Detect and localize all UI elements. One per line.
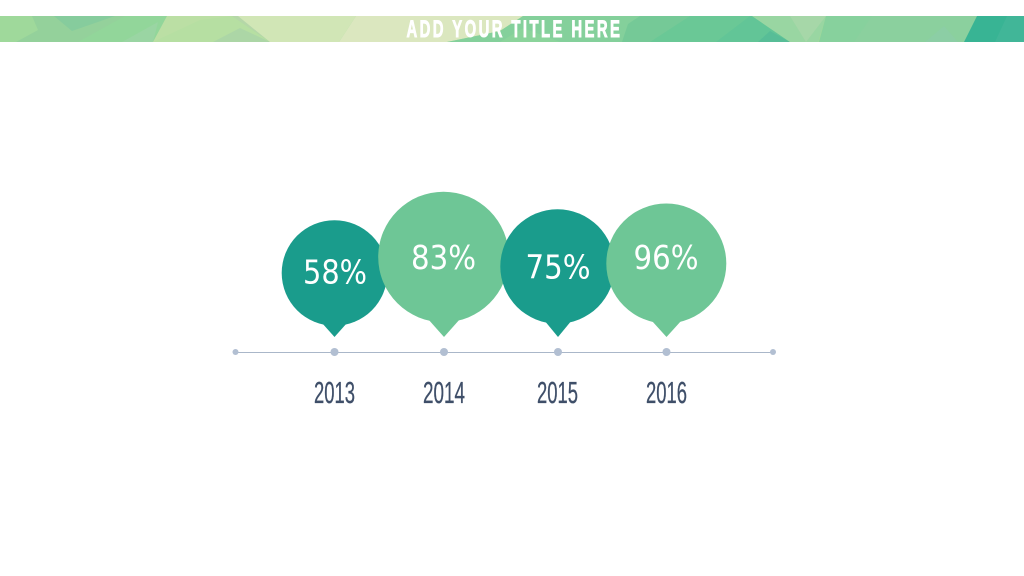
year label 2014: 2014	[423, 375, 465, 410]
bubble: 2015 75%: 75%	[526, 248, 590, 286]
bubble: 2014 83%: 83%	[411, 238, 476, 277]
bubble: 2013 58%: 58%	[303, 252, 367, 292]
year label 2015: 2015	[537, 375, 578, 410]
bubble: 2014 83%	[378, 192, 509, 337]
timeline axis	[232, 348, 776, 356]
bubble: 2016 96%	[606, 204, 726, 337]
year label 2013: 2013	[314, 375, 355, 410]
bubble: 2015 75%	[500, 209, 615, 337]
bubble: 2016 96%: 96%	[634, 238, 698, 277]
year label 2016: 2016	[646, 375, 687, 410]
bubble: 2013 58%	[282, 220, 387, 337]
banner title text: ADD YOUR TITLE HERE	[406, 17, 622, 43]
title banner	[0, 16, 1024, 43]
